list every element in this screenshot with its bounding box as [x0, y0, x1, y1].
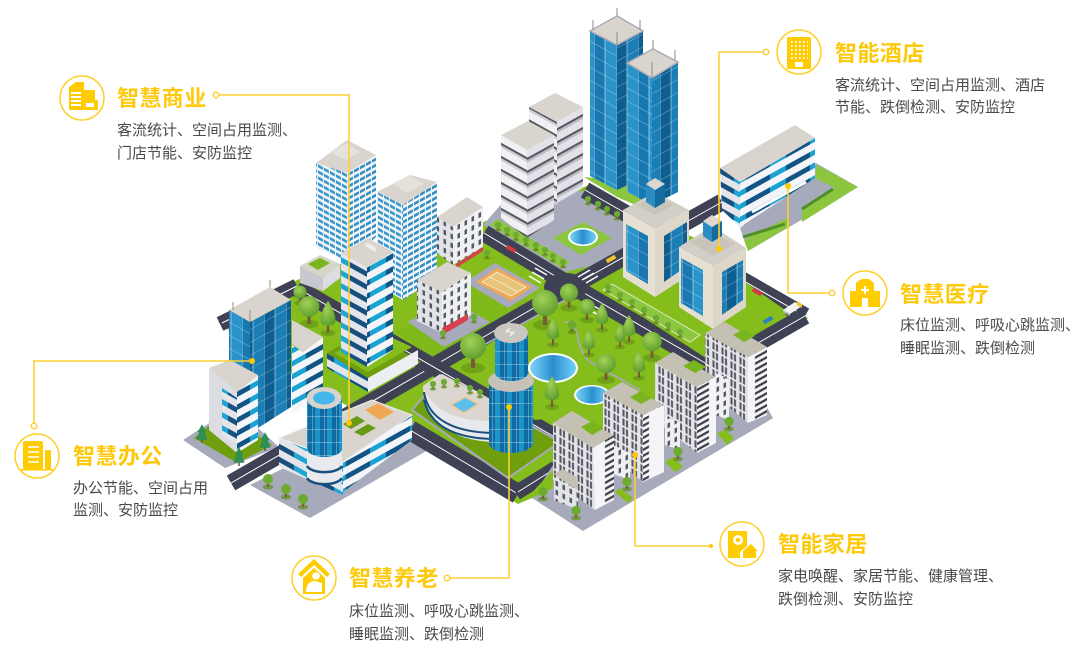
annex three [665, 415, 680, 450]
park paths [475, 300, 640, 390]
city ground plan [183, 163, 858, 531]
icon: house with elder [292, 556, 336, 600]
icon: office block [15, 434, 59, 478]
road: plaza avenue [484, 233, 712, 367]
ground: main block [218, 185, 808, 520]
description [117, 122, 297, 162]
callout: smart office [15, 434, 208, 519]
high-rise four [705, 322, 767, 423]
description [778, 568, 1003, 608]
tower: tall glass front [627, 40, 678, 205]
description: 睡眠监测、跌倒检测 [349, 626, 484, 643]
icon: hotel building [777, 30, 821, 74]
building: white stepped front [501, 121, 554, 238]
road: west stub [220, 286, 297, 324]
building: small white rear [437, 197, 483, 265]
high-rise pad [532, 378, 773, 531]
icon: commerce building [60, 76, 104, 120]
tower base lawn [584, 177, 645, 207]
ground: grey pads around mid buildings [408, 298, 490, 347]
awning [456, 247, 483, 268]
high-rise three [655, 352, 716, 453]
ground: hospital lawns [744, 165, 858, 251]
description: 办公节能、空间占用 [73, 480, 208, 497]
hotel tower two [679, 215, 746, 329]
heading: 智慧商业 [117, 86, 207, 111]
high-rise pad trees [538, 417, 734, 520]
awning [442, 314, 468, 334]
road: south-west to north-east avenue [231, 202, 722, 483]
hotel tower one [623, 178, 689, 297]
high-rise pad edge lawn [525, 470, 553, 500]
heading: 智慧办公 [73, 444, 163, 469]
ground: hospital plot [740, 163, 858, 251]
icon: hospital [843, 271, 887, 315]
leader: smart home [632, 452, 713, 548]
annex: small podium [300, 255, 340, 291]
tower: light-blue front [377, 175, 437, 300]
leader: smart commerce [213, 92, 352, 426]
description: 跌倒检测、安防监控 [778, 591, 913, 608]
callout: smart commerce [60, 76, 297, 162]
commercial podium [279, 387, 412, 495]
tower: light-blue rear [316, 140, 376, 262]
roundabout [544, 273, 588, 301]
park lawn [470, 302, 706, 446]
description [349, 603, 529, 643]
building: white stepped rear [529, 93, 583, 205]
park trees [532, 284, 662, 410]
high-rise one [553, 411, 614, 510]
hospital building [720, 125, 815, 227]
annex two [613, 445, 630, 480]
description [835, 77, 1045, 116]
leader: smart office [31, 358, 255, 429]
callout: smart healthcare [843, 271, 1080, 357]
conifers [196, 424, 270, 466]
semicircle pool building [423, 374, 492, 442]
ground: court block [396, 272, 540, 360]
leader: smart elderly care [444, 404, 512, 581]
hotel garden strip [603, 284, 700, 342]
description: 床位监测、呼吸心跳监测、 [900, 317, 1080, 334]
description: 门店节能、安防监控 [117, 145, 252, 162]
description: 客流统计、空间占用监测、 [117, 122, 297, 139]
ground: plaza green strip [490, 219, 570, 268]
description: 节能、跌倒检测、安防监控 [835, 99, 1015, 116]
ground: central plaza [483, 190, 645, 272]
ground: commercial pad [250, 420, 428, 518]
road: east avenue [725, 316, 805, 362]
rooftop garden [343, 403, 394, 436]
hospital hedges [743, 189, 833, 237]
description [900, 317, 1080, 357]
white striped office [292, 320, 323, 413]
roads [220, 190, 805, 494]
high-rise green strips [615, 430, 734, 503]
heading: 智慧医疗 [900, 282, 990, 307]
road: south avenue [410, 430, 518, 494]
cars [506, 245, 773, 324]
high-rise two [603, 382, 664, 482]
heading: 智慧养老 [349, 566, 439, 591]
basketball court [476, 268, 532, 301]
heading: 智能家居 [778, 532, 868, 557]
blue office tower [229, 280, 291, 428]
semicircle building lawn [412, 375, 560, 478]
callout: smart home [720, 522, 1003, 608]
podium trees [263, 474, 308, 510]
cylindrical tower [488, 323, 534, 453]
central striped tower [327, 238, 421, 392]
icon: key and house [720, 522, 764, 566]
hotel block lawn [598, 266, 788, 362]
glass cylinder [307, 398, 342, 457]
pond 2 [574, 385, 610, 405]
description: 床位监测、呼吸心跳监测、 [349, 603, 529, 620]
road: south corner [516, 468, 556, 493]
leader: smart hotel [716, 49, 769, 252]
road: north-west avenue [297, 288, 560, 440]
ground: left front pad [183, 412, 279, 468]
tower podium [327, 330, 421, 392]
heading: 智能酒店 [835, 41, 925, 66]
road: upper avenue [585, 190, 805, 316]
white striped front office [209, 360, 258, 453]
callout: smart elderly care [292, 556, 529, 643]
leader: smart healthcare [785, 183, 835, 296]
description: 客流统计、空间占用监测、酒店 [835, 77, 1045, 94]
description [73, 480, 208, 519]
fountain garden [553, 222, 612, 255]
truck [783, 301, 802, 316]
annex four [716, 372, 729, 420]
callout: smart hotel [777, 30, 1045, 116]
tower: tall glass rear [590, 8, 643, 190]
description: 睡眠监测、跌倒检测 [900, 340, 1035, 357]
lower rotunda [307, 440, 342, 484]
building: white mid [417, 262, 471, 333]
pond 1 [528, 353, 578, 383]
mid trees [294, 196, 683, 373]
description: 监测、安防监控 [73, 502, 178, 519]
description: 家电唤醒、家居节能、健康管理、 [778, 568, 1003, 585]
helipad mark [506, 328, 514, 336]
zebra crossings [529, 268, 604, 316]
